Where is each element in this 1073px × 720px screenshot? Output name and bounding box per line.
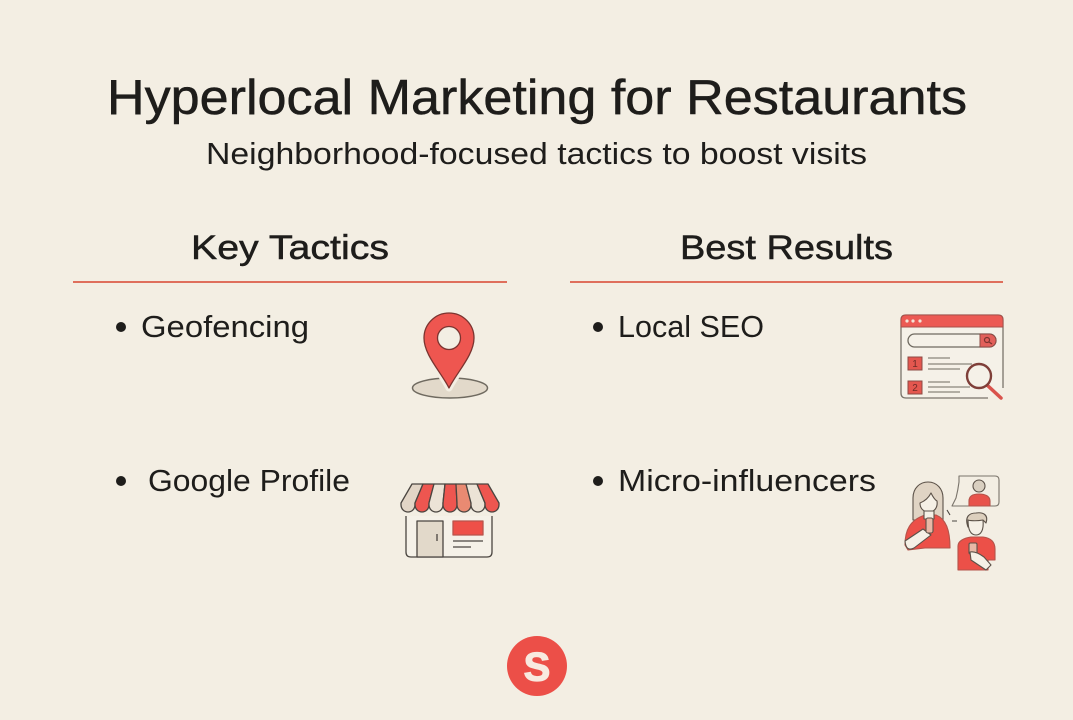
icon: influencers [905, 476, 999, 570]
logo [507, 636, 567, 696]
icon: search results window: 2 [912, 383, 918, 394]
item: micro-influencers: Micro-influencers [618, 463, 876, 498]
panel: best results [570, 229, 1003, 570]
icon: storefront [401, 484, 499, 557]
heading: key tactics: Key Tactics [191, 229, 389, 267]
title: Hyperlocal Marketing for Restaurants [107, 71, 967, 125]
subtitle: Neighborhood-focused tactics to boost visits [206, 136, 867, 171]
speech bubble [952, 476, 999, 506]
icon: map pin [412, 313, 488, 398]
heading: best results: Best Results [680, 229, 893, 267]
notification ticks [947, 510, 957, 521]
logo: S [524, 646, 550, 690]
item: google profile: Google Profile [148, 463, 350, 498]
item: geofencing: Geofencing [141, 309, 309, 344]
man [958, 513, 995, 570]
item: local seo: Local SEO [618, 309, 764, 344]
woman [905, 482, 950, 550]
panel: key tactics [73, 229, 507, 557]
icon: search results window [901, 315, 1003, 398]
icon: search results window: 1 [912, 359, 918, 370]
